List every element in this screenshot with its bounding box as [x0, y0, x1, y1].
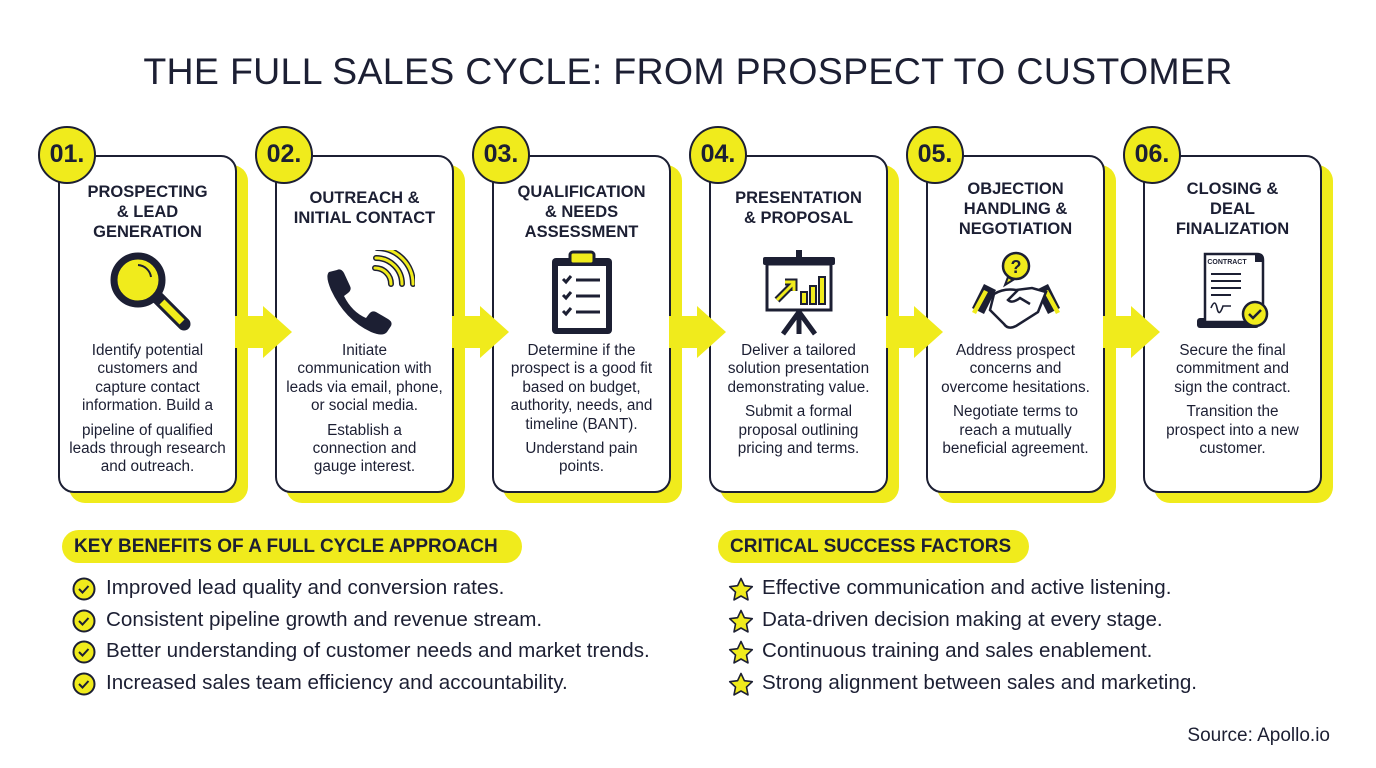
heading: CLOSING &: [1187, 180, 1278, 198]
heading: PROSPECTING: [87, 183, 208, 201]
list: success factors: Effective communication and active listening.: [762, 576, 1171, 599]
arrow 4-5: [886, 306, 943, 358]
heading: & LEAD: [117, 203, 178, 221]
description: Understand pain: [525, 440, 638, 457]
heading: OUTREACH &: [310, 189, 420, 207]
badge 01: 01.: [50, 140, 84, 168]
icon: magnifier: [110, 252, 190, 330]
list: key benefits: Better understanding of customer needs and market trends.: [106, 639, 650, 662]
description: timeline (BANT).: [525, 416, 638, 433]
badge 01: [38, 126, 96, 184]
heading: critical success factors: CRITICAL SUCCESS FACTORS: [730, 536, 1011, 557]
heading: critical success factors: [718, 530, 1029, 563]
description: commitment and: [1176, 360, 1289, 377]
heading: ASSESSMENT: [525, 223, 638, 241]
card 3: qualification: [472, 126, 682, 503]
description: prospect into a new: [1166, 422, 1299, 439]
description: pricing and terms.: [738, 440, 859, 457]
arrow 1-2: [235, 306, 292, 358]
heading: [735, 189, 862, 227]
description: Address prospect: [956, 342, 1075, 359]
icon: contract: [1197, 252, 1268, 328]
description: points.: [559, 458, 604, 475]
heading: [87, 183, 208, 241]
badge 02: [255, 126, 313, 184]
badge 05: 05.: [918, 140, 952, 168]
description: Initiate: [342, 342, 387, 359]
icon: handshake: [972, 252, 1060, 329]
description: Determine if the: [528, 342, 635, 359]
description: Deliver a tailored: [741, 342, 856, 359]
description: communication with: [297, 360, 432, 377]
arrow 5-6: [1103, 306, 1160, 358]
description: Establish a: [327, 422, 402, 439]
badge 03: 03.: [484, 140, 518, 168]
heading: GENERATION: [93, 223, 202, 241]
heading: INITIAL CONTACT: [294, 209, 435, 227]
description: [727, 342, 870, 457]
description: pipeline of qualified: [82, 422, 213, 439]
icon: phone: [327, 250, 415, 334]
heading: & PROPOSAL: [744, 209, 853, 227]
description: customers and: [97, 360, 198, 377]
description: Transition the: [1186, 403, 1279, 420]
list: key benefits: Increased sales team efficiency and accountability.: [106, 670, 568, 694]
badge 06: [1123, 126, 1181, 184]
card 1: prospecting: [38, 126, 248, 503]
heading: OBJECTION: [967, 180, 1064, 198]
description: or social media.: [311, 397, 418, 414]
description: connection and: [313, 440, 416, 457]
description: [69, 342, 226, 475]
description: Submit a formal: [745, 403, 852, 420]
description: leads via email, phone,: [286, 379, 443, 396]
description: beneficial agreement.: [942, 440, 1089, 457]
source: Source: Apollo.io: [1187, 725, 1330, 746]
heading: [959, 180, 1072, 238]
badge 04: [689, 126, 747, 184]
badge 03: [472, 126, 530, 184]
description: leads through research: [69, 440, 226, 457]
description: customer.: [1199, 440, 1266, 457]
heading: QUALIFICATION: [517, 183, 646, 201]
description: [941, 342, 1090, 457]
heading: [294, 189, 436, 227]
icon: contract: CONTRACT: [1207, 259, 1247, 266]
card 5: objection handling: [906, 126, 1116, 503]
description: gauge interest.: [314, 458, 415, 475]
heading: key benefits: [62, 530, 522, 563]
heading: DEAL: [1210, 200, 1255, 218]
description: based on budget,: [522, 379, 641, 396]
card 2: outreach: [255, 126, 465, 503]
description: [1166, 342, 1299, 457]
heading: PRESENTATION: [735, 189, 862, 207]
list: success factors: Data-driven decision making at every stage.: [762, 608, 1163, 630]
arrow 3-4: [669, 306, 726, 358]
description: and outreach.: [101, 458, 194, 475]
arrow 2-3: [452, 306, 509, 358]
description: solution presentation: [728, 360, 869, 377]
description: proposal outlining: [739, 422, 858, 439]
description: capture contact: [95, 379, 200, 396]
description: demonstrating value.: [727, 379, 870, 396]
description: Identify potential: [92, 342, 203, 359]
title: THE FULL SALES CYCLE: FROM PROSPECT TO CUSTOMER: [143, 50, 1233, 92]
description: [511, 342, 652, 475]
heading: & NEEDS: [545, 203, 618, 221]
heading: key benefits: KEY BENEFITS OF A FULL CYCLE APPROACH: [74, 536, 498, 557]
list: success factors: [728, 576, 1197, 696]
list: success factors: Continuous training and sales enablement.: [762, 639, 1152, 662]
list: key benefits: [72, 576, 650, 696]
description: Negotiate terms to: [953, 403, 1078, 420]
card 6: closing: [1123, 126, 1333, 503]
card 4: presentation: [689, 126, 899, 503]
description: [286, 342, 443, 475]
description: reach a mutually: [959, 422, 1072, 439]
badge 05: [906, 126, 964, 184]
list: key benefits: Improved lead quality and conversion rates.: [106, 576, 504, 599]
heading: [517, 183, 646, 241]
description: prospect is a good fit: [511, 360, 652, 377]
icon: presentation board: [763, 250, 835, 336]
list: success factors: Strong alignment between sales and marketing.: [762, 670, 1197, 694]
badge 06: 06.: [1135, 140, 1169, 168]
description: information. Build a: [82, 397, 213, 414]
list: key benefits: Consistent pipeline growth and revenue stream.: [106, 608, 542, 630]
icon: clipboard: [552, 250, 612, 334]
description: authority, needs, and: [511, 397, 652, 414]
description: concerns and: [970, 360, 1061, 377]
heading: NEGOTIATION: [959, 220, 1072, 238]
heading: FINALIZATION: [1176, 220, 1289, 238]
description: Secure the final: [1179, 342, 1286, 359]
description: overcome hesitations.: [941, 379, 1090, 396]
icon: handshake: ?: [1010, 257, 1022, 277]
badge 04: 04.: [701, 140, 735, 168]
heading: HANDLING &: [964, 200, 1067, 218]
badge 02: 02.: [267, 140, 301, 168]
heading: [1176, 180, 1289, 238]
description: sign the contract.: [1174, 379, 1291, 396]
